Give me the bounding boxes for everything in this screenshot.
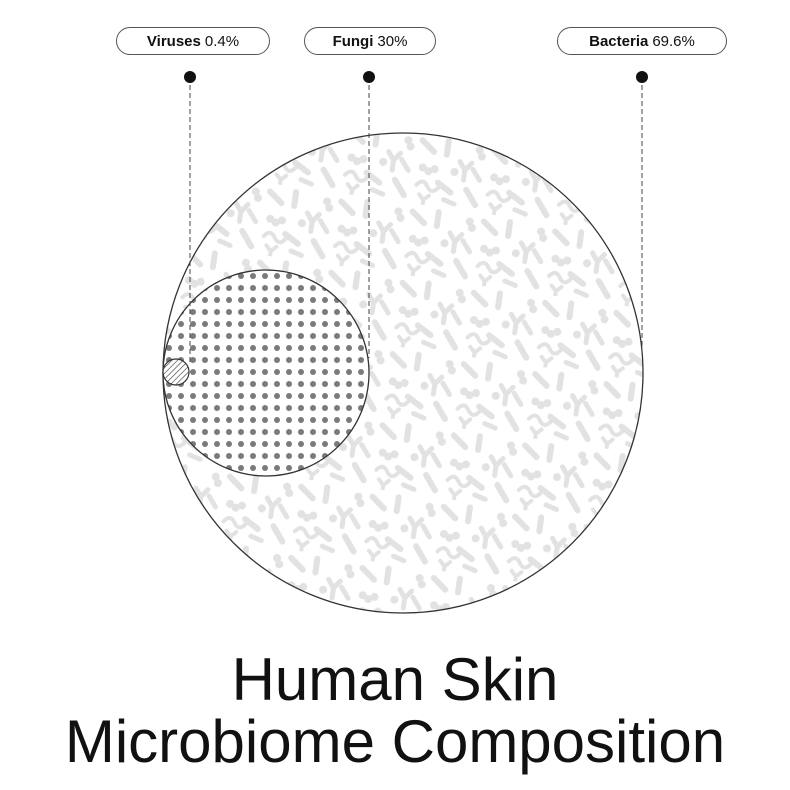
title: Microbiome Composition: [65, 708, 725, 775]
label: fungi: [304, 27, 436, 55]
label: fungi: 30%: [377, 32, 407, 50]
label: viruses: 0.4%: [205, 32, 239, 50]
bacteria circle: [163, 133, 643, 613]
leader dots: [184, 71, 648, 83]
viruses circle: [163, 359, 189, 385]
leader lines: [190, 77, 642, 362]
label: viruses: Viruses: [147, 32, 201, 50]
label: bacteria: Bacteria: [589, 32, 648, 50]
label: fungi: Fungi: [333, 32, 373, 50]
label: bacteria: [557, 27, 727, 55]
fungi circle: [163, 270, 369, 476]
label: viruses: [116, 27, 270, 55]
label: bacteria: 69.6%: [652, 32, 695, 50]
title: [65, 646, 725, 775]
title: Human Skin: [232, 646, 558, 713]
